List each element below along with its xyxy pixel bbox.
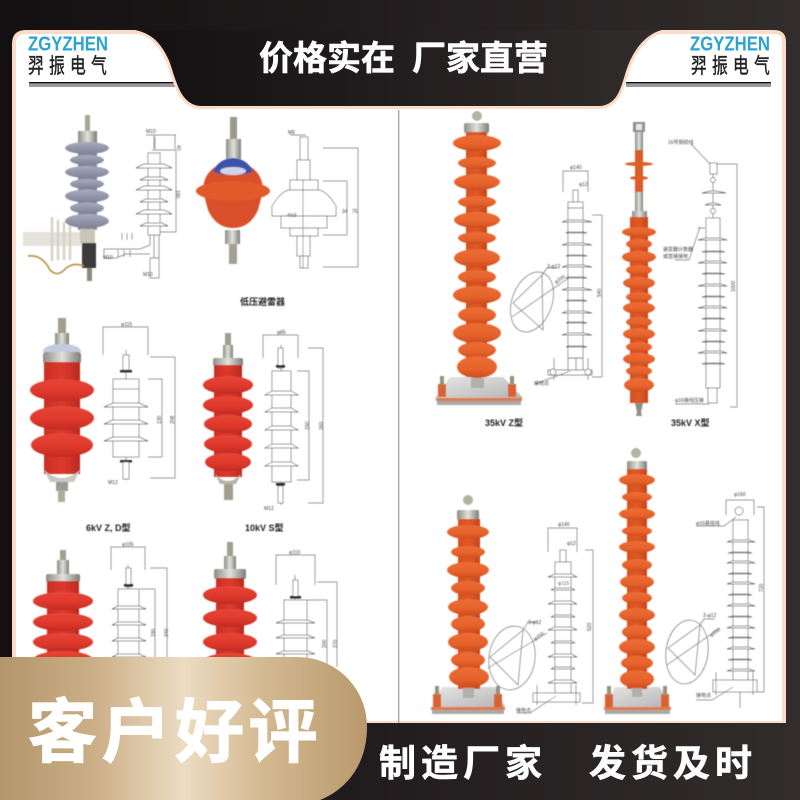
diagram: lower right A: 3-φ12 [528, 620, 541, 626]
arrester: 6kV Z, D [30, 318, 94, 502]
arrester: lower left B [203, 542, 257, 671]
diagram: 35kV X: 避雷器计数器 [663, 246, 693, 253]
label: 35kV Z: 35kV Z型 [485, 417, 523, 428]
diagram: grey arrester: M10 [146, 129, 156, 135]
diagram: 35kV Z: 3-φ12 [547, 264, 560, 270]
diagram: 6kV Z, D: M12 [108, 480, 118, 486]
label: low voltage arrester: 低压避雷器 [240, 296, 285, 307]
diagram: low voltage arrester [272, 130, 358, 268]
arrester: lower right A [431, 495, 505, 714]
diagram: 6kV Z, D: 130 [157, 415, 163, 424]
logo: left [28, 32, 175, 87]
diagram: 35kV Z: φ12 [579, 182, 588, 188]
logo rule right [626, 82, 771, 87]
diagram: low voltage arrester: 34 [342, 209, 348, 215]
arrester: lower right B [604, 448, 671, 714]
diagram: lower right B: 720 [759, 583, 765, 592]
diagram: lower right A: φ115 [558, 581, 569, 587]
logo: right [626, 32, 775, 87]
diagram: 10kV S: φ85 [277, 330, 286, 336]
diagram: lower right B: φ16悬挂线 [696, 520, 720, 527]
logo wordmark left: ZGYZHEN [28, 32, 108, 56]
diagram: 10kV S: 150 [305, 421, 311, 430]
diagram: 35kV Z [503, 165, 603, 387]
diagram: lower right A: φ200 [533, 631, 546, 643]
diagram: 10kV S: M12 [264, 506, 274, 512]
diagram: grey arrester: M10 [103, 255, 113, 261]
diagram: low voltage arrester: M6 [288, 130, 295, 136]
logo chinese right: 羿振电气 [691, 54, 775, 78]
bottom slogans [379, 743, 757, 784]
title part 2: 厂家直营 [412, 40, 548, 78]
diagram: grey arrester: 40 [175, 145, 181, 151]
label: 35kV X: 35kV X型 [671, 417, 710, 428]
diagram: 35kV X: φ16接线压接 [675, 397, 704, 404]
label: 6kV Z, D: 6kV Z, D型 [86, 522, 131, 533]
diagram: lower left A [111, 542, 170, 665]
diagram: grey arrester [103, 129, 181, 278]
gold review badge [0, 657, 367, 800]
diagram: 10kV S: 260 [319, 421, 325, 430]
diagram: 35kV Z: φ140 [570, 165, 582, 171]
diagram: 10kV S [263, 330, 325, 512]
diagram: 35kV X [663, 139, 737, 407]
arrester: 10kV S [203, 333, 253, 500]
diagram: lower right B: 接地点 [696, 692, 711, 699]
diagram: 35kV Z: 540 [597, 288, 603, 297]
diagram: lower left A: φ105 [122, 542, 134, 548]
diagram: 6kV Z, D [103, 322, 176, 486]
diagram: lower right A: φ140 [558, 522, 570, 528]
arrester: 35kV X [622, 122, 656, 416]
diagram: lower right A: 520 [587, 622, 593, 631]
diagram: lower left B: φ110 [289, 550, 300, 556]
logo rule left [29, 82, 175, 87]
arrester: lower left A [33, 550, 93, 669]
diagram: low voltage arrester: Φ58 [287, 213, 297, 219]
badge text: 客户好评 [28, 694, 322, 771]
diagram: 6kV Z, D: φ115 [121, 322, 132, 328]
diagram: lower right B: φ160 [734, 492, 746, 498]
diagram: lower right B [662, 492, 765, 708]
diagram: lower left A: 240 [164, 628, 170, 637]
diagram: 35kV Z: 接地点 [534, 380, 549, 387]
diagram: 35kV X: 1000 [731, 281, 737, 292]
arrester: low voltage round [196, 117, 270, 264]
slogan: manufacturer: 制造厂家 [379, 743, 547, 784]
diagram: low voltage arrester: 75 [352, 209, 358, 215]
logo wordmark right: ZGYZHEN [690, 32, 770, 56]
diagram: grey arrester: M10 [143, 272, 153, 278]
divider [398, 110, 399, 723]
diagram: lower left A: 190 [151, 628, 157, 637]
diagram: 35kV X: 或直接接地 [663, 253, 688, 260]
diagram: 35kV X: 16号铜绞线 [668, 139, 694, 146]
slogan: shipping: 发货及时 [589, 743, 757, 784]
diagram: lower right A: 接地点 [516, 707, 531, 714]
diagram: lower right B: 3-φ12 [703, 613, 716, 619]
title part 1: 价格实在 [259, 40, 395, 78]
product catalogue drawings [23, 111, 765, 714]
label: 10kV S: 10kV S型 [245, 522, 284, 533]
bottom bar [0, 723, 800, 800]
diagram: grey arrester: 180 [174, 190, 180, 199]
header tab [127, 0, 667, 108]
diagram: 6kV Z, D: 208 [170, 415, 176, 424]
diagram: 35kV Z: φ200 [554, 274, 567, 286]
diagram: lower left B: 270 [333, 639, 339, 648]
arrester: 35kV Z [435, 111, 523, 405]
diagram: lower left B: 200 [322, 639, 328, 648]
diagram: lower right A [485, 522, 593, 714]
diagram: lower right A: φ12 [567, 541, 576, 547]
diagram: lower right B: φ200 [709, 627, 722, 639]
diagram: lower left B [276, 550, 339, 670]
logo chinese left: 羿振电气 [28, 54, 112, 78]
title [259, 40, 548, 78]
top dark band [0, 0, 800, 30]
arrester: grey with bracket [23, 115, 109, 281]
